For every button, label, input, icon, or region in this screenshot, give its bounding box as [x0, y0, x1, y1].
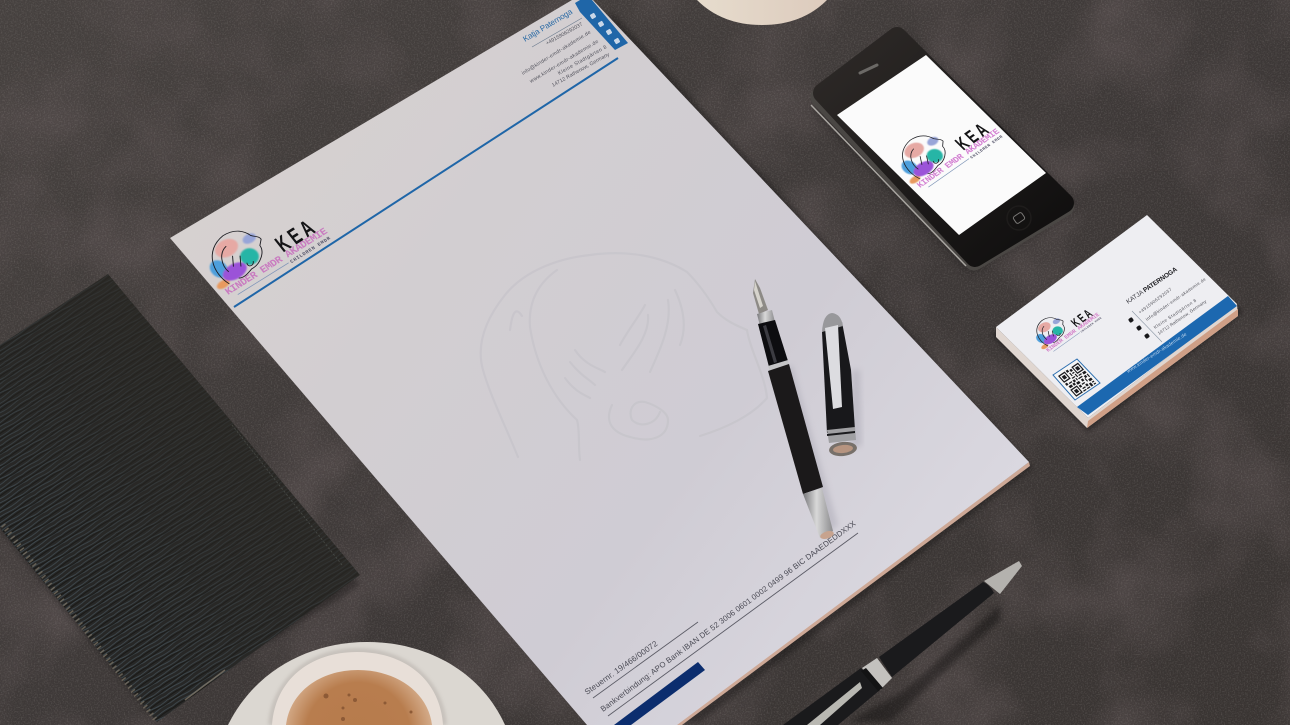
- ballpoint pen: [783, 561, 1022, 725]
- fountain pen cap: [822, 313, 862, 457]
- logo: Kinder EMDR Akademie letterhead: KINDER EMDR AKADEMIE: [223, 226, 331, 298]
- card contact details: info@kinder-emdr-akademie.de: [1145, 276, 1207, 322]
- card contact details: +4915906292037: [1138, 286, 1173, 315]
- header contact block: 14712 Rathenow, Germany: [551, 52, 611, 89]
- logo on phone: KEA: [951, 118, 996, 154]
- card face: [996, 215, 1237, 418]
- logo on phone: KINDER EMDR AKADEMIE: [915, 127, 1002, 190]
- footer tax number: [583, 622, 698, 698]
- logo on phone: [885, 100, 1006, 195]
- logo on phone: CHILDREN EMDR: [970, 135, 1005, 160]
- sheet edge: [673, 462, 1030, 725]
- header contact block: www.kinder-emdr-akademie.de: [529, 39, 600, 85]
- logo on card: [1025, 294, 1104, 357]
- card contact icons: [1128, 317, 1150, 339]
- logo: Kinder EMDR Akademie letterhead: [192, 191, 333, 304]
- smartphone: [811, 35, 1078, 272]
- header contact block: info@kinder-emdr-akademie.de: [521, 30, 592, 77]
- black leather notebook: [0, 274, 360, 722]
- navy footer bar: [614, 662, 705, 725]
- card contact details: KATJA PATERNOGA: [1125, 266, 1179, 306]
- footer tax number: Steuernr. 19/466/00072: [583, 639, 660, 697]
- logo on card: KINDER EMDR AKADEMIE: [1044, 311, 1102, 353]
- fountain pen: [753, 279, 838, 540]
- header contact block: +4915906292037: [545, 22, 584, 47]
- card website: www.kinder-emdr-akademie.de: [1126, 332, 1188, 375]
- logo: Kinder EMDR Akademie letterhead: KEA: [271, 214, 323, 257]
- barrel: [768, 364, 823, 494]
- blue band: [1077, 296, 1237, 415]
- logo on card: KEA: [1069, 306, 1097, 330]
- card contact details: 14712 Rathenow, Germany: [1157, 298, 1208, 336]
- card contact details: [1125, 266, 1208, 342]
- coffee saucer and cup: [228, 642, 505, 725]
- barrel end: [803, 488, 833, 538]
- header contact block: Katja Paternoga: [521, 7, 574, 44]
- logo on card: CHILDREN EMDR: [1080, 317, 1103, 333]
- card stack edges: [996, 304, 1238, 428]
- coffee crema: [286, 670, 432, 725]
- sheet shadow: [600, 10, 1033, 722]
- letterhead sheet: [170, 0, 1033, 725]
- QR code: [1053, 359, 1100, 400]
- watermark head outline: [481, 253, 767, 460]
- earpiece: [860, 65, 877, 73]
- grip section: [758, 320, 788, 367]
- card contact details: Kleine Stadtgärten 8: [1153, 298, 1198, 330]
- business card stack: [992, 215, 1243, 432]
- header contact block: [521, 7, 611, 89]
- nib: [753, 279, 768, 314]
- sheet face: [170, 0, 1029, 725]
- logo watercolour head: [192, 221, 275, 291]
- phone screen: [837, 55, 1046, 235]
- home button: [1007, 206, 1031, 230]
- blue header tab with social icons: [575, 0, 628, 50]
- coffee cup at top edge: [697, 0, 827, 25]
- header divider line: [234, 58, 618, 307]
- header contact block: Kleine Stadtgärten 8: [557, 44, 608, 77]
- logo: Kinder EMDR Akademie letterhead: CHILDREN EMDR: [289, 236, 332, 265]
- footer bank details: Bankverbindung: APO Bank IBAN DE 52 3006 0601 0002 0499 96 BIC DAAEDEDDXXX: [599, 519, 858, 714]
